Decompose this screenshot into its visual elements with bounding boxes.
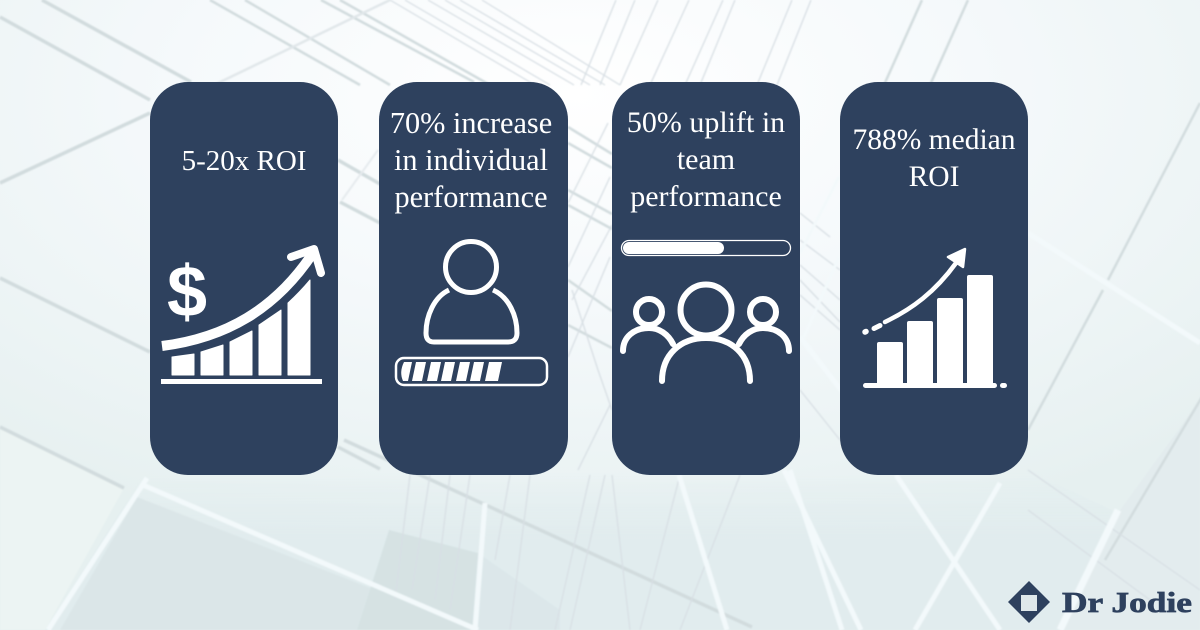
heading: 50% uplift in team performance: 50% uplift in [627,106,785,139]
panel: median ROI [840,82,1028,475]
heading: 70% increase in individual performance [390,106,552,214]
icon: person with progress bar [394,239,548,386]
icon: progress bar and team of three people [620,240,792,384]
icon: bar chart with rising arrow [862,248,1007,388]
heading: 70% increase in individual performance: 70% increase [390,106,552,140]
logo: Dr Jodie: Dr Jodie [1062,587,1192,619]
panel: team performance [612,82,800,475]
icon: dollar sign and rising bars with arrow: $ [167,252,207,332]
shaded lower planes [45,470,1118,630]
heading: 50% uplift in team performance: performance [630,180,782,213]
grey mullions [0,0,752,627]
heading: 788% median ROI: 788% median [852,124,1016,156]
heading: 788% median ROI [852,124,1016,193]
logo: Dr Jodie [1008,581,1192,623]
heading: 50% uplift in team performance: team [677,143,735,176]
heading: 5-20x ROI: 5-20x ROI [182,145,306,177]
panel: individual performance [379,82,568,475]
heading: 70% increase in individual performance: performance [394,180,548,214]
heading: 70% increase in individual performance: in individual [394,143,548,177]
heading: 50% uplift in team performance [627,106,785,213]
heading: 788% median ROI: ROI [909,161,959,193]
icon: dollar sign and rising bars with arrow [161,245,325,384]
panel: 5-20x ROI [150,82,338,475]
